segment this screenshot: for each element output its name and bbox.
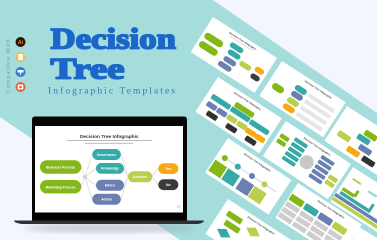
laptop screen [35,126,183,212]
node: business process [40,160,81,174]
node: governance [92,149,121,160]
slide thumbnail: mixed pills [324,106,377,182]
slide thumbnail: pill list: Decision Tree Infographic [304,79,333,100]
page number marker [177,205,180,208]
node: action: Action [101,198,112,202]
icon: illustrator: Ai [18,40,24,46]
node: knowledge [96,163,124,174]
slide thumbnail: flow shapes: Decision Tree Infographic [247,215,276,236]
node: no [158,179,178,190]
slide thumbnail: table: Decision Tree Infographic [317,199,346,220]
node: yes [158,163,178,174]
connector lines [81,154,158,200]
title: Tree [50,53,124,85]
slide thumbnail: flow shapes [205,199,292,240]
icon: google slides [16,52,26,62]
node: marketing process: Marketing Process [46,185,76,189]
subtitle: Infographic Templates [48,86,175,96]
slide thumbnail: central circle: Decision Tree Infographic [303,136,332,157]
laptop base [14,220,204,224]
compatible with label: Compatible With [6,38,12,93]
node: no: No [166,183,171,187]
node: yes: Yes [165,167,171,171]
slide thumbnail: decision tree: Decision Tree Infographic [228,31,258,51]
laptop bezel [32,116,187,221]
slide thumbnail: decision tree [191,17,277,93]
slide thumbnail: central circle [263,121,351,199]
slide thumbnail: stacked bars [330,167,377,232]
slide thumbnail: process steps: Decision Tree Infographic [243,152,272,173]
laptop [14,116,204,233]
slide thumbnail: staggered blocks: Decision Tree Infographic [233,91,263,112]
node: ethics: Ethics [105,184,115,188]
icon: powerpoint [16,82,26,92]
node: governance: Governance [97,153,116,157]
software icons column [16,37,26,92]
hub dot [83,175,87,179]
node: marketing process [40,180,81,193]
slide thumbnail: staggered blocks [195,77,282,153]
node: business process: Business Process [46,166,75,170]
laptop shadow [25,223,195,233]
node: knowledge: Knowledge [101,167,119,171]
screen description [67,140,152,144]
node: ethics [96,180,124,191]
slide thumbnail: process steps [205,138,291,215]
slide thumbnail: table [275,183,362,240]
slide thumbnails group [191,17,377,240]
node: action [92,194,121,205]
node: decision: Decision [133,175,147,179]
title: Decision [50,24,176,56]
icon: keynote [16,67,26,77]
title [50,24,176,85]
node: decision [128,171,152,182]
slide thumbnail: corner [352,227,377,240]
screen heading: Decision Tree Infographic [80,134,139,140]
slide thumbnail: pill list [259,61,346,137]
